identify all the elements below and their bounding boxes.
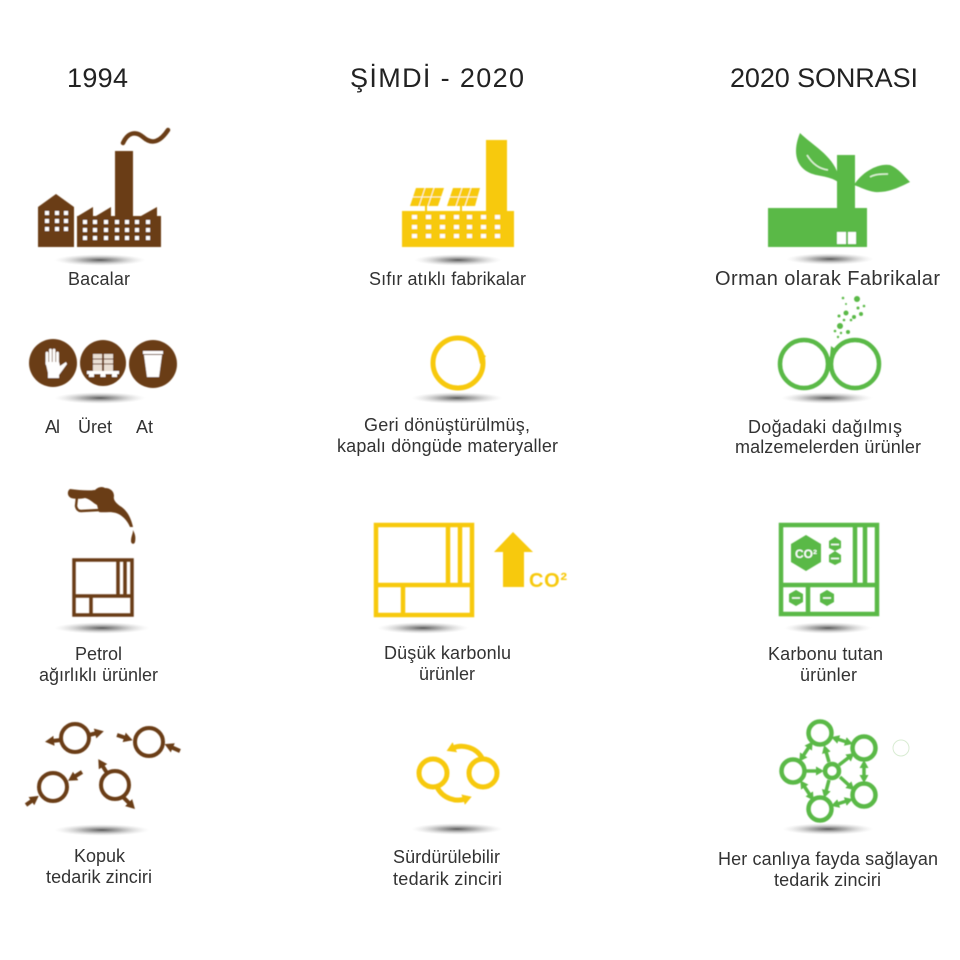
label line 2: tedarik zinciri bbox=[393, 869, 502, 889]
label line 2: kapalı döngüde materyaller bbox=[337, 436, 558, 456]
shadow bbox=[781, 392, 873, 404]
label: Bacalar bbox=[68, 269, 130, 289]
label: Her canlıya fayda sağlayan bbox=[718, 849, 938, 869]
shadow bbox=[784, 622, 872, 634]
icon: green factory with leaves bbox=[768, 133, 910, 247]
icon: green infinity loops with particles bbox=[780, 296, 879, 388]
heading: 1994: 1994 bbox=[67, 63, 128, 93]
icon: pallet in circle bbox=[80, 340, 126, 386]
shadow bbox=[786, 253, 874, 265]
label: Al: Al bbox=[45, 417, 60, 437]
label: Kopuk bbox=[74, 846, 126, 866]
panel: recycled closed loop materials bbox=[337, 338, 558, 456]
icon: green product with CO2 hexagons bbox=[781, 525, 877, 614]
icon: yellow product outline bbox=[376, 525, 472, 615]
icon: two yellow linked rings bbox=[419, 746, 497, 800]
icon: brown factory bbox=[38, 130, 168, 247]
label: Düşük karbonlu bbox=[384, 643, 511, 663]
label line 2: ürünler bbox=[419, 664, 475, 684]
icon: hand in circle bbox=[29, 339, 77, 387]
label line 2: malzemelerden ürünler bbox=[735, 437, 921, 457]
label: Sıfır atıklı fabrikalar bbox=[369, 269, 526, 289]
shadow bbox=[54, 824, 150, 836]
label line 2: ağırlıklı ürünler bbox=[39, 665, 158, 685]
label line 2: tedarik zinciri bbox=[774, 870, 881, 890]
shadow bbox=[411, 392, 503, 404]
shadow bbox=[54, 254, 146, 266]
icon: yellow factory with solar panels bbox=[402, 140, 514, 247]
shadow bbox=[782, 823, 874, 835]
icon: green connected network bbox=[782, 722, 876, 820]
label: Üret: Üret bbox=[78, 417, 112, 437]
label: Doğadaki dağılmış bbox=[748, 417, 902, 437]
icon: CO2 up arrow bbox=[494, 532, 567, 592]
panel: sustainable supply chain bbox=[393, 746, 503, 889]
heading: after 2020: 2020 SONRASI bbox=[730, 63, 918, 93]
label: Orman olarak Fabrikalar bbox=[715, 268, 940, 290]
shadow bbox=[411, 823, 503, 835]
label: Geri dönüştürülmüş, bbox=[364, 415, 530, 435]
label: At: At bbox=[136, 417, 153, 437]
label: Petrol bbox=[75, 644, 122, 664]
icon: CO2 up arrow: CO² bbox=[529, 570, 567, 592]
shadow bbox=[54, 622, 150, 634]
panel: zero waste factories bbox=[369, 140, 526, 289]
panel: carbon capturing products bbox=[768, 525, 883, 685]
icon: faint ring bbox=[893, 740, 909, 756]
icon: yellow closed loop bbox=[433, 338, 486, 388]
panel: petrol heavy products bbox=[39, 487, 158, 685]
icon: green product with CO2 hexagons: CO² bbox=[795, 547, 817, 561]
icon: disconnected brown rings bbox=[26, 724, 180, 805]
panel: factories as forests bbox=[715, 133, 940, 290]
panel: broken supply chain bbox=[26, 724, 180, 887]
heading: now to 2020: ŞİMDİ - 2020 bbox=[350, 62, 524, 93]
icon: fuel nozzle bbox=[68, 487, 135, 544]
panel: beneficial supply chain bbox=[718, 722, 938, 890]
label: Sürdürülebilir bbox=[393, 847, 500, 867]
label: Karbonu tutan bbox=[768, 644, 883, 664]
panel: take make dispose bbox=[29, 339, 177, 437]
shadow bbox=[54, 392, 146, 404]
panel: products from dispersed materials bbox=[735, 296, 921, 457]
icon: cup in circle bbox=[129, 340, 177, 388]
panel: low carbon products bbox=[376, 525, 567, 684]
label line 2: ürünler bbox=[800, 665, 857, 685]
icon: brown product outline bbox=[74, 560, 132, 615]
label line 2: tedarik zinciri bbox=[46, 867, 152, 887]
panel: chimneys bbox=[38, 130, 168, 289]
shadow bbox=[414, 254, 502, 266]
shadow bbox=[377, 622, 469, 634]
